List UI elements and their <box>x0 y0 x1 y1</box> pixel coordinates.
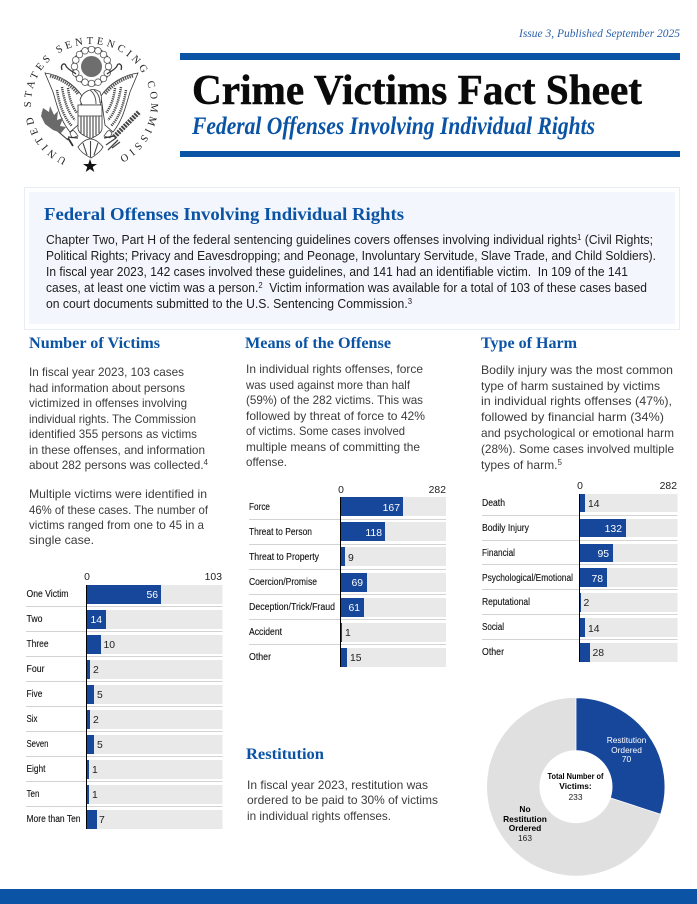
bar chart: means of the offense: Threat to Person <box>249 527 312 538</box>
bar chart: means of the offense: 69 <box>351 578 363 589</box>
text: number of victims: single case. <box>29 533 94 547</box>
bar chart: type of harm: 95 <box>597 549 609 560</box>
bar chart: number of victims: 103 <box>205 572 222 583</box>
bar chart: type of harm: 0 <box>577 481 583 492</box>
bar chart: type of harm: Reputational <box>482 597 530 608</box>
intro text: (Civil Rights; <box>581 233 653 247</box>
bar chart: means of the offense: Coercion/Promise <box>249 577 317 588</box>
text: means of the offense: (59%) of the 282 victims. This was <box>246 393 423 407</box>
bar chart: means of the offense: 61 <box>348 603 360 614</box>
bar chart: number of victims: 0 <box>84 572 90 583</box>
donut chart: restitution: Ordered <box>611 745 642 755</box>
bar chart: type of harm <box>482 481 678 662</box>
issue date: Issue 3, Published September 2025 <box>518 26 680 40</box>
bar chart: means of the offense: 0 <box>338 485 344 496</box>
donut chart: restitution: 233 <box>569 792 583 802</box>
donut chart: restitution: Restitution <box>503 814 547 824</box>
text: number of victims: Multiple victims were identified in <box>29 487 207 501</box>
text: number of victims <box>29 365 209 547</box>
bar chart: number of victims: 5 <box>97 690 103 701</box>
text: type of harm: type of harm sustained by victims <box>481 379 660 393</box>
bar chart: number of victims: Eight <box>26 764 46 775</box>
donut chart: restitution: 163 <box>518 833 532 843</box>
intro heading: Federal Offenses Involving Individual Rights <box>44 204 404 224</box>
bar chart: means of the offense: Accident <box>249 627 282 638</box>
intro text: 2 <box>258 281 263 290</box>
text: means of the offense <box>245 362 425 469</box>
bar chart: means of the offense: Force <box>249 502 270 513</box>
heading: Means of the Offense: Means of the Offense <box>245 335 391 352</box>
intro text: Victim information was available for a total of 103 of these cases based <box>263 281 647 295</box>
bar chart: number of victims: One Victim <box>26 589 68 600</box>
bar chart: means of the offense: 15 <box>350 653 362 664</box>
bar chart: number of victims: Ten <box>26 789 40 800</box>
text: number of victims: had information about persons <box>29 381 185 395</box>
donut chart: restitution: No <box>519 804 531 814</box>
text: restitution: ordered to be paid to 30% of victims <box>247 793 438 807</box>
bar chart: type of harm: 132 <box>605 524 622 535</box>
bar chart: type of harm: Other <box>482 647 505 658</box>
intro text: 3 <box>408 297 413 306</box>
text: type of harm: (28%). Some cases involved multiple <box>481 442 674 456</box>
bar chart: number of victims: 7 <box>99 815 105 826</box>
donut chart: restitution: Total Number of <box>548 771 604 781</box>
text: number of victims: in these offenses, and information <box>29 443 205 457</box>
text: restitution: In fiscal year 2023, restitution was <box>247 778 428 792</box>
bar chart: number of victims: 56 <box>146 590 158 601</box>
bar chart: means of the offense: Threat to Property <box>249 552 319 563</box>
intro text: Political Rights; Privacy and Eavesdropping; and Peonage, Involuntary Servitude, Slave Trade, and Child Soldiers). <box>46 249 656 263</box>
bar chart: number of victims <box>26 572 222 829</box>
text: means of the offense: offense. <box>246 455 287 469</box>
donut chart: restitution: Victims: <box>559 781 592 791</box>
text: type of harm: Bodily injury was the most common <box>481 363 673 377</box>
title: Crime Victims Fact Sheet <box>192 68 642 114</box>
bar chart: type of harm: 14 <box>588 624 600 635</box>
heading: Number of Victims: Number of Victims <box>29 335 160 352</box>
text: type of harm: followed by financial harm (34%) <box>481 410 664 424</box>
text: number of victims: victimized in offenses involving <box>29 396 187 410</box>
bar chart: type of harm: Financial <box>482 548 515 559</box>
bar chart: means of the offense: 282 <box>429 485 446 496</box>
text: number of victims: victims ranged from one to 45 in a <box>29 518 204 532</box>
intro text: Chapter Two, Part H of the federal sentencing guidelines covers offenses involving individual rights <box>46 233 596 247</box>
text: number of victims: identified 355 persons as victims <box>29 427 197 441</box>
bar chart: number of victims: 14 <box>90 615 102 626</box>
bar chart: number of victims: 1 <box>92 790 98 801</box>
footer band <box>0 889 697 904</box>
bar chart: means of the offense: 118 <box>365 528 382 539</box>
heading: Restitution: Restitution <box>246 746 324 763</box>
bar chart: type of harm: Death <box>482 498 505 509</box>
bar chart: type of harm: Bodily Injury <box>482 523 529 534</box>
bar chart: number of victims: Three <box>26 639 49 650</box>
bar chart: means of the offense: Other <box>249 652 272 663</box>
text: number of victims: In fiscal year 2023, 103 cases <box>29 365 184 379</box>
text: type of harm: types of harm. <box>481 458 557 472</box>
heading: Type of Harm: Type of Harm <box>481 335 578 352</box>
donut chart: restitution: 70 <box>622 754 631 764</box>
bar chart: number of victims: Six <box>26 714 38 725</box>
donut chart: restitution <box>487 698 665 876</box>
text: type of harm: and psychological or emotional harm <box>481 426 674 440</box>
intro text: 1 <box>577 233 582 242</box>
bar chart: type of harm: 28 <box>592 648 604 659</box>
bar chart: means of the offense <box>249 485 446 667</box>
subtitle: Federal Offenses Involving Individual Rights <box>191 113 595 140</box>
text: means of the offense: multiple means of committing the <box>246 440 420 454</box>
bar chart: type of harm: Social <box>482 622 504 633</box>
text: number of victims: individual rights. The Commission <box>29 412 196 426</box>
bar chart: means of the offense: 1 <box>345 628 351 639</box>
bar chart: means of the offense: 167 <box>383 503 400 514</box>
bar chart: number of victims: 2 <box>93 665 99 676</box>
header rules <box>180 53 680 157</box>
text: means of the offense: followed by threat of force to 42% <box>246 409 425 423</box>
bar chart: type of harm: 2 <box>584 598 590 609</box>
intro text: In fiscal year 2023, 142 cases involved these guidelines, and 141 had an identifiable victim. In 109 of the 141 <box>46 265 628 279</box>
seal: United States Sentencing Commission <box>24 37 158 172</box>
text: means of the offense: was used against more than half <box>245 378 411 392</box>
bar chart: number of victims: 2 <box>93 715 99 726</box>
donut chart: restitution: Restitution <box>607 735 647 745</box>
bar chart: number of victims: 1 <box>92 765 98 776</box>
intro text: cases, at least one victim was a person. <box>46 281 269 295</box>
bar chart: type of harm: 14 <box>588 499 600 510</box>
bar chart: type of harm: Psychological/Emotional <box>482 573 573 584</box>
bar chart: means of the offense: 9 <box>348 553 354 564</box>
text: means of the offense: of victims. Some cases involved <box>246 424 405 438</box>
intro text: on court documents submitted to the U.S. Sentencing Commission. <box>46 297 420 311</box>
text: means of the offense: In individual rights offenses, force <box>246 362 423 376</box>
bar chart: number of victims: Seven <box>26 739 48 750</box>
bar chart: number of victims: Two <box>26 614 43 625</box>
text: number of victims: 46% of these cases. The number of <box>29 503 209 517</box>
text: number of victims: 4 <box>204 458 209 467</box>
text: type of harm <box>481 363 674 472</box>
bar chart: type of harm: 282 <box>660 481 677 492</box>
bar chart: number of victims: Five <box>26 689 43 700</box>
donut chart: restitution: Ordered <box>509 823 541 833</box>
bar chart: number of victims: More than Ten <box>26 814 80 825</box>
text: type of harm: in individual rights offenses (47%), <box>481 394 672 408</box>
intro text <box>46 233 656 311</box>
text: restitution: in individual rights offenses. <box>247 809 391 823</box>
bar chart: type of harm: 78 <box>591 574 603 585</box>
bar chart: means of the offense: Deception/Trick/Fraud <box>249 602 335 613</box>
text: restitution <box>247 778 438 823</box>
text: type of harm: 5 <box>558 458 563 467</box>
bar chart: number of victims: Four <box>26 664 45 675</box>
bar chart: number of victims: 5 <box>97 740 103 751</box>
panel: introduction <box>24 188 680 330</box>
text: number of victims: about 282 persons was collected. <box>29 458 207 472</box>
bar chart: number of victims: 10 <box>104 640 115 651</box>
